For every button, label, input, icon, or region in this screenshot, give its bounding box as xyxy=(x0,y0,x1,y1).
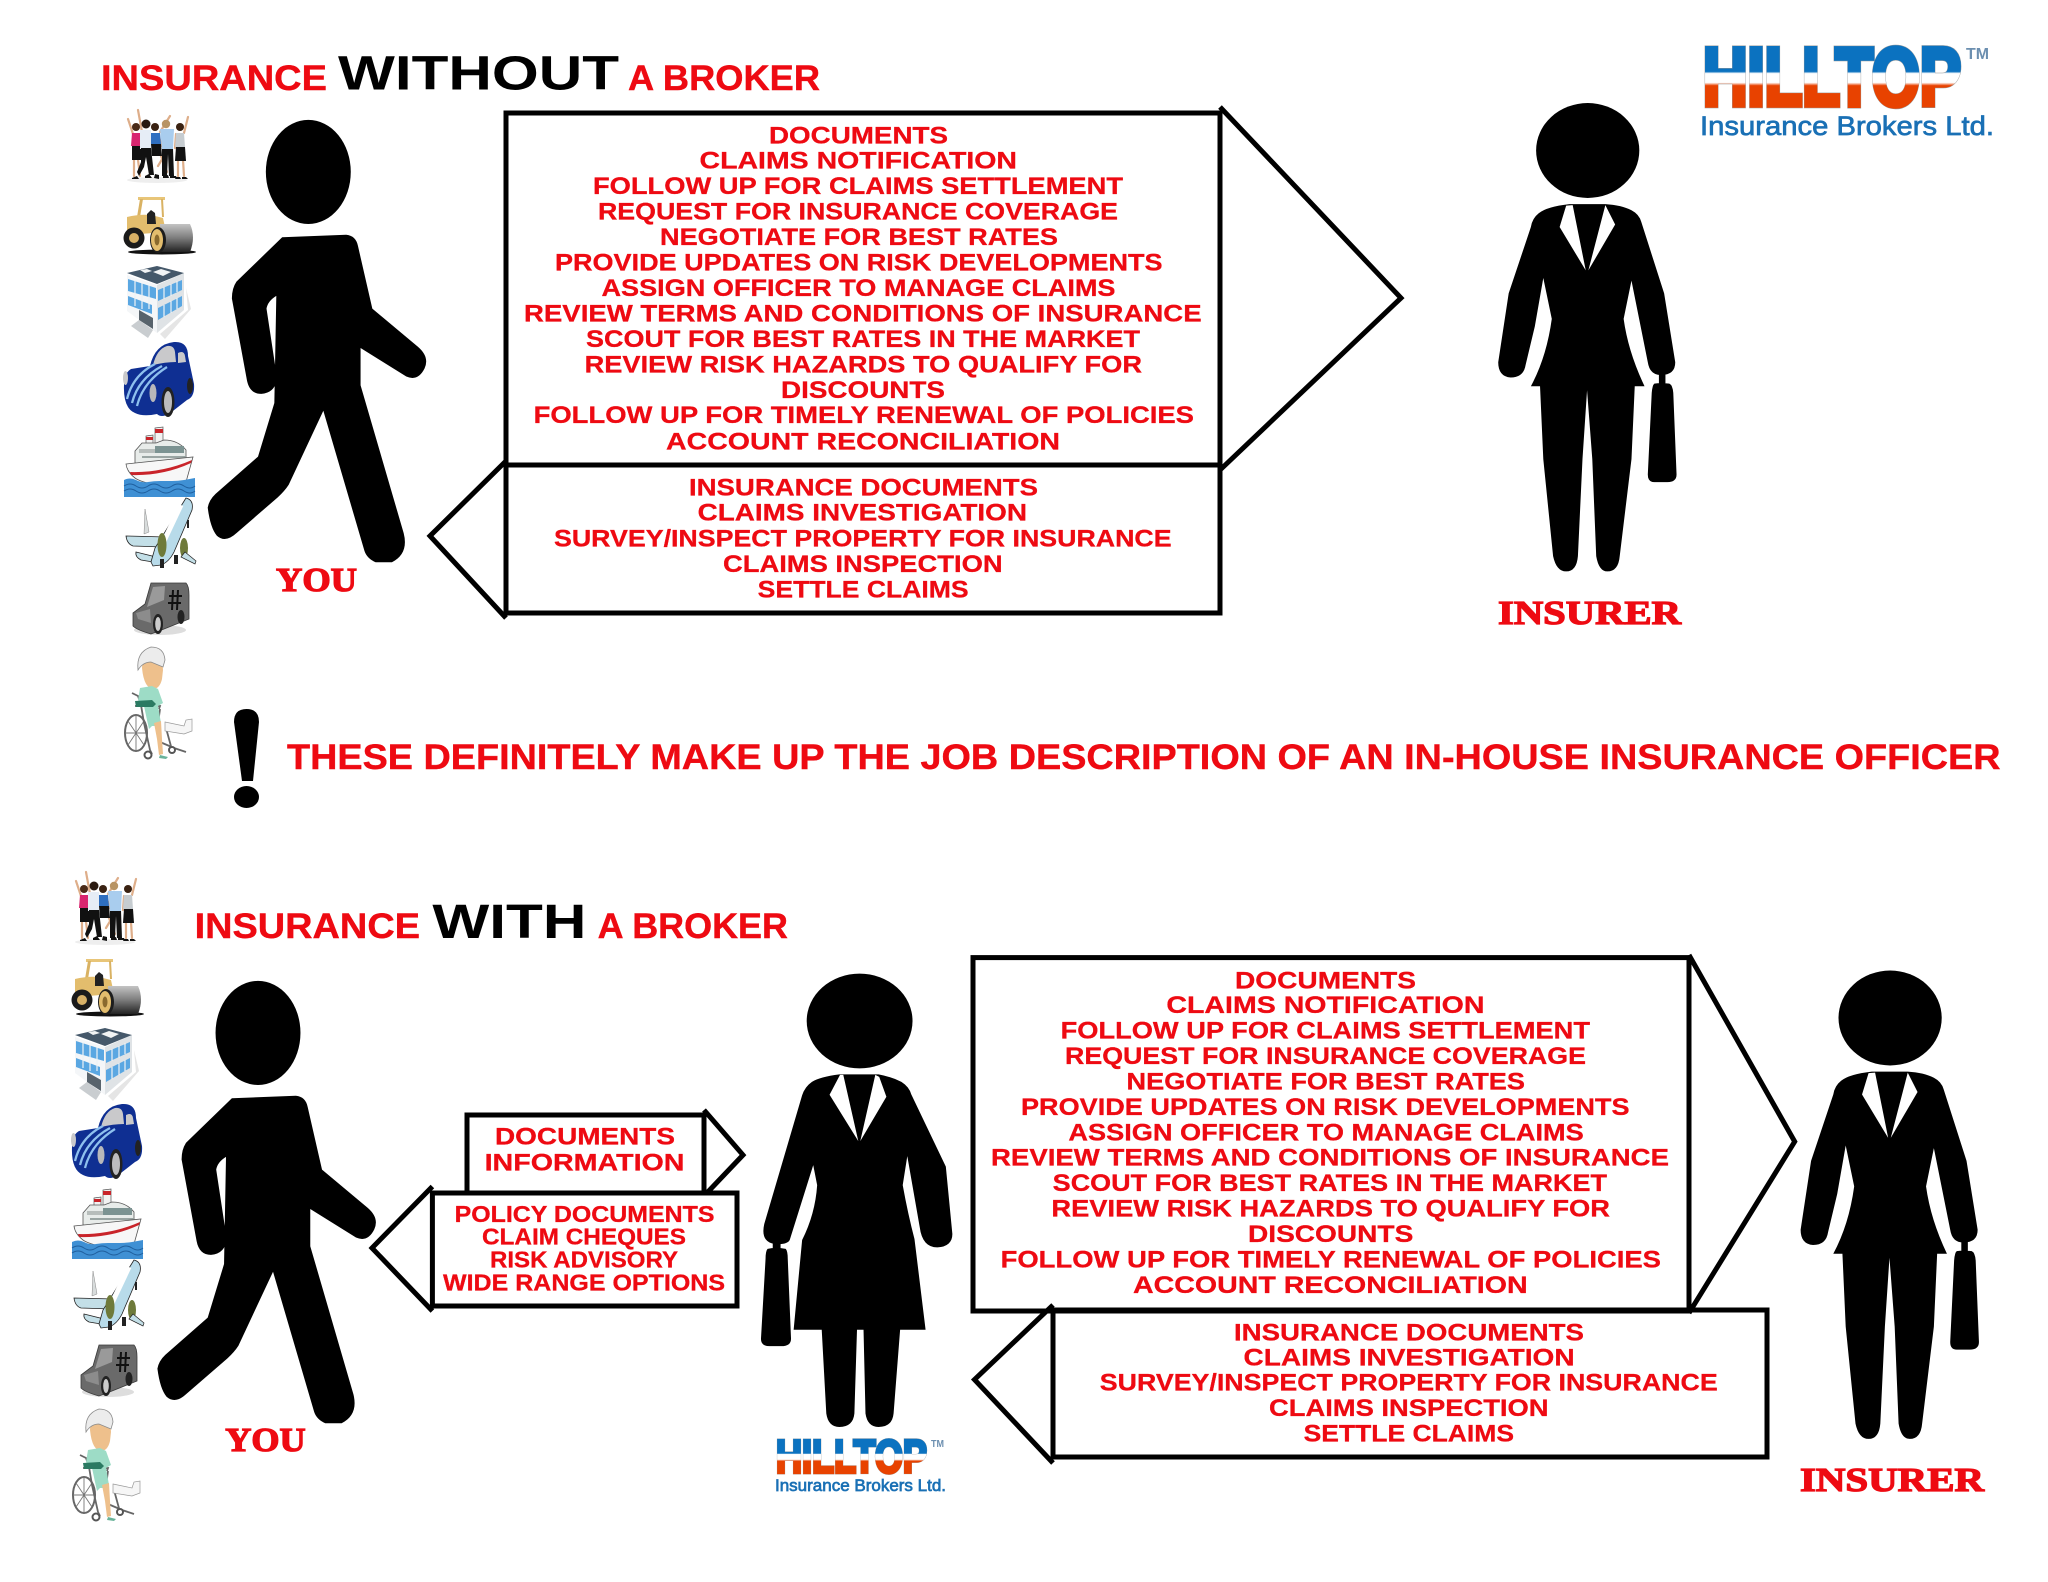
arrow box: broker tasks to insurer: ASSIGN OFFICER TO MANAGE CLAIMS xyxy=(1068,1119,1584,1146)
arrow box: broker tasks to insurer: FOLLOW UP FOR TIMELY RENEWAL OF POLICIES xyxy=(1001,1247,1661,1274)
arrow box: tasks from you to insurer: PROVIDE UPDATES ON RISK DEVELOPMENTS xyxy=(555,249,1162,276)
logo: Hilltop top right: HILLTOP xyxy=(1703,32,1961,123)
arrow box: broker tasks to insurer: DOCUMENTS xyxy=(1235,967,1416,994)
arrow box: broker tasks to insurer: NEGOTIATE FOR BEST RATES xyxy=(1126,1068,1525,1096)
arrow box: you to broker: DOCUMENTS xyxy=(495,1124,675,1151)
arrow box: services from insurer to you: SETTLE CLAIMS xyxy=(758,576,969,604)
arrow box: tasks from you to insurer: SCOUT FOR BEST RATES IN THE MARKET xyxy=(586,326,1140,353)
title: insurance with a broker: WITH xyxy=(432,896,586,949)
figure: insurer woman (top) xyxy=(1498,103,1677,571)
arrow box: tasks from you to insurer: REVIEW RISK HAZARDS TO QUALIFY FOR xyxy=(585,352,1142,378)
arrow box: tasks from you to insurer xyxy=(506,107,1401,470)
arrow box: broker to you: RISK ADVISORY xyxy=(490,1246,678,1272)
title: insurance with a broker: A BROKER xyxy=(598,907,788,946)
icon: ship xyxy=(72,1189,143,1259)
arrow box: broker to you: WIDE RANGE OPTIONS xyxy=(443,1269,725,1295)
icon: road roller xyxy=(124,197,196,254)
icon: armored van xyxy=(81,1345,137,1397)
icon: airplane xyxy=(74,1260,144,1330)
arrow box: broker tasks to insurer: FOLLOW UP FOR CLAIMS SETTLEMENT xyxy=(1061,1018,1590,1045)
icon: people xyxy=(127,110,188,183)
arrow box: tasks from you to insurer: NEGOTIATE FOR BEST RATES xyxy=(660,224,1058,251)
figure: you walking (top) xyxy=(208,120,426,562)
arrow box: broker tasks to insurer: CLAIMS NOTIFICATION xyxy=(1166,992,1484,1019)
icon: building xyxy=(75,1028,139,1101)
arrow box: insurer services to broker: CLAIMS INVESTIGATION xyxy=(1244,1345,1575,1372)
label: you (top): YOU xyxy=(276,562,357,599)
arrow box: broker to you xyxy=(372,1186,737,1311)
title: insurance without a broker: WITHOUT xyxy=(338,48,619,100)
icon: car xyxy=(71,1104,142,1179)
arrow box: tasks from you to insurer: ACCOUNT RECONCILIATION xyxy=(666,428,1060,456)
arrow box: tasks from you to insurer: DOCUMENTS xyxy=(769,122,948,149)
figure: insurer woman (bottom) xyxy=(1801,971,1979,1439)
arrow box: services from insurer to you: INSURANCE DOCUMENTS xyxy=(689,475,1038,502)
logo: Hilltop top right: TM xyxy=(1966,46,1989,63)
title: insurance without a broker: A BROKER xyxy=(628,59,820,98)
arrow box: broker tasks to insurer: PROVIDE UPDATES ON RISK DEVELOPMENTS xyxy=(1021,1094,1630,1121)
arrow box: broker tasks to insurer: REVIEW RISK HAZARDS TO QUALIFY FOR xyxy=(1051,1196,1610,1223)
arrow box: broker tasks to insurer: ACCOUNT RECONCILIATION xyxy=(1133,1272,1528,1299)
arrow box: insurer services to broker: SETTLE CLAIMS xyxy=(1304,1421,1514,1448)
arrow box: insurer services to broker xyxy=(974,1305,1767,1463)
icon: ship xyxy=(124,427,195,497)
title: insurance with a broker xyxy=(195,896,788,949)
figure: broker woman xyxy=(761,974,952,1427)
arrow box: insurer services to broker: SURVEY/INSPECT PROPERTY FOR INSURANCE xyxy=(1100,1370,1718,1397)
logo: Hilltop under broker: HILLTOP xyxy=(776,1430,927,1482)
title: insurance with a broker: INSURANCE xyxy=(195,907,420,946)
arrow box: services from insurer to you: SURVEY/INSPECT PROPERTY FOR INSURANCE xyxy=(554,526,1172,552)
arrow box: tasks from you to insurer: CLAIMS NOTIFICATION xyxy=(700,147,1017,174)
logo: Hilltop under broker: TM xyxy=(931,1439,944,1450)
arrow box: broker tasks to insurer xyxy=(973,955,1795,1313)
arrow box: broker tasks to insurer: REVIEW TERMS AND CONDITIONS OF INSURANCE xyxy=(991,1145,1669,1172)
arrow box: insurer services to broker: INSURANCE DOCUMENTS xyxy=(1234,1319,1584,1346)
arrow box: tasks from you to insurer: DISCOUNTS xyxy=(781,377,945,404)
arrow box: tasks from you to insurer: REQUEST FOR INSURANCE COVERAGE xyxy=(598,198,1118,225)
icon: road roller xyxy=(72,959,144,1016)
arrow box: tasks from you to insurer: ASSIGN OFFICER TO MANAGE CLAIMS xyxy=(602,275,1116,302)
arrow box: tasks from you to insurer: FOLLOW UP FOR CLAIMS SETTLEMENT xyxy=(593,173,1123,200)
arrow box: broker to you: CLAIM CHEQUES xyxy=(482,1224,686,1250)
icon: injured person in wheelchair xyxy=(125,647,192,759)
note: job description statement: THESE DEFINITELY MAKE UP THE JOB DESCRIPTION OF AN IN-HOUSE INSURANCE OFFICER xyxy=(287,738,2000,777)
logo: Hilltop top right: Insurance Brokers Ltd. xyxy=(1700,111,1994,141)
arrow box: you to broker xyxy=(467,1110,743,1196)
arrow box: tasks from you to insurer: REVIEW TERMS AND CONDITIONS OF INSURANCE xyxy=(524,300,1202,328)
icon: people xyxy=(75,872,136,945)
icon: car xyxy=(123,342,194,417)
arrow box: services from insurer to you: CLAIMS INSPECTION xyxy=(723,551,1003,578)
icon column: insured risks (top) xyxy=(123,110,196,759)
arrow box: broker tasks to insurer: DISCOUNTS xyxy=(1248,1221,1413,1248)
icon: exclamation mark xyxy=(234,709,259,808)
arrow box: broker to you: POLICY DOCUMENTS xyxy=(455,1201,714,1227)
logo: Hilltop top right: HILLTOP xyxy=(1703,32,1961,123)
icon: armored van xyxy=(133,583,189,635)
arrow box: broker tasks to insurer: REQUEST FOR INSURANCE COVERAGE xyxy=(1065,1043,1586,1070)
icon: building xyxy=(127,266,191,339)
figure: you walking (bottom) xyxy=(157,981,376,1423)
arrow box: broker tasks to insurer: SCOUT FOR BEST RATES IN THE MARKET xyxy=(1053,1170,1607,1197)
icon column: insured risks (bottom) xyxy=(71,872,144,1521)
label: insurer (bottom): INSURER xyxy=(1800,1462,1985,1499)
logo: Hilltop under broker: HILLTOP xyxy=(776,1430,927,1482)
icon: airplane xyxy=(126,498,196,568)
label: you (bottom): YOU xyxy=(225,1422,306,1459)
arrow box: insurer services to broker: CLAIMS INSPECTION xyxy=(1269,1395,1548,1422)
arrow box: services from insurer to you xyxy=(430,461,1220,618)
icon: injured person in wheelchair xyxy=(73,1409,140,1521)
logo: Hilltop under broker: Insurance Brokers Ltd. xyxy=(775,1476,946,1495)
arrow box: services from insurer to you: CLAIMS INVESTIGATION xyxy=(698,500,1027,527)
arrow box: tasks from you to insurer: FOLLOW UP FOR TIMELY RENEWAL OF POLICIES xyxy=(534,402,1194,429)
label: insurer (top): INSURER xyxy=(1498,595,1682,632)
arrow box: you to broker: INFORMATION xyxy=(485,1149,684,1176)
title: insurance without a broker xyxy=(101,48,820,100)
title: insurance without a broker: INSURANCE xyxy=(101,59,327,98)
